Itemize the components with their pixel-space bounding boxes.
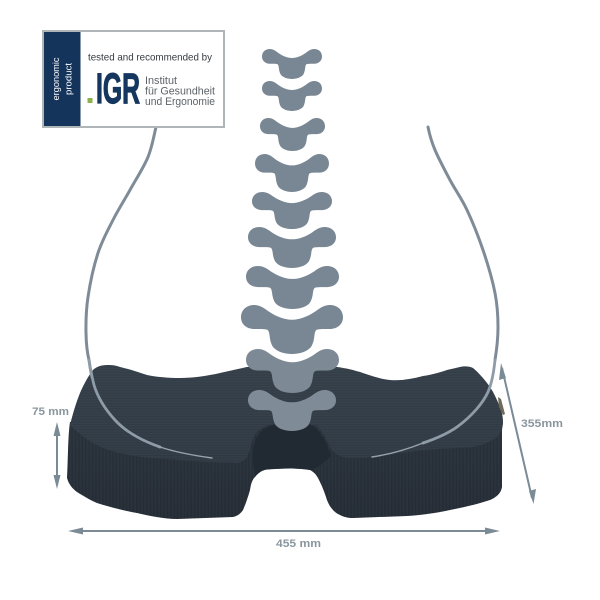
vertebra 10 xyxy=(248,390,336,431)
vertebra 7 xyxy=(246,266,339,309)
zipper tag xyxy=(498,397,505,415)
vertebra 3 xyxy=(260,118,325,151)
vertebra 1 xyxy=(262,49,322,79)
side panel label: ergonomic xyxy=(51,57,61,100)
IGR green dot xyxy=(88,98,92,103)
cushion top surface xyxy=(70,365,503,463)
vertebra 9 xyxy=(246,349,339,393)
badge navy side panel xyxy=(44,32,80,126)
width arrow xyxy=(68,528,500,534)
vertebra 8 xyxy=(241,305,343,354)
IGR logo letters: IGR xyxy=(96,65,140,113)
height arrow xyxy=(54,422,60,489)
side panel label second line: product xyxy=(64,62,74,95)
cushion side wall xyxy=(67,400,503,519)
vertebra 6 xyxy=(248,227,336,268)
spine xyxy=(241,49,343,431)
vertebra 4 xyxy=(255,154,329,192)
depth arrow xyxy=(499,363,536,504)
depth label: 355mm xyxy=(521,418,563,430)
vertebra 2 xyxy=(262,81,322,111)
badge frame xyxy=(43,31,224,127)
height label: 75 mm xyxy=(32,406,69,418)
institute name: Institut xyxy=(145,75,177,87)
vertebra 5 xyxy=(252,192,332,229)
width label: 455 mm xyxy=(276,538,321,550)
right body contour xyxy=(372,127,498,457)
institute name: für Gesundheit xyxy=(145,86,215,98)
certification badge xyxy=(43,31,224,127)
institute name xyxy=(145,75,215,108)
institute name: und Ergonomie xyxy=(145,96,215,108)
badge heading: tested and recommended by xyxy=(88,52,213,64)
seat cushion xyxy=(67,365,505,519)
left body contour xyxy=(86,127,212,458)
cushion centre notch shadow xyxy=(253,424,331,477)
